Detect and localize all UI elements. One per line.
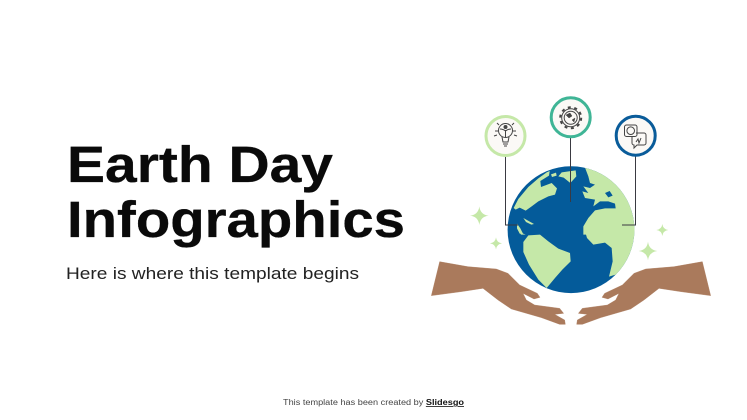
- central america: [518, 230, 526, 235]
- caribbean: [523, 218, 534, 225]
- footer credit: This template has been created by Slidesgo: [283, 398, 464, 407]
- connector lines: [506, 137, 636, 225]
- southern hemisphere land: [518, 227, 645, 288]
- africa: [586, 226, 634, 277]
- globe: [508, 166, 645, 293]
- sparkles: [470, 206, 668, 260]
- illustration: earth in hands: [431, 166, 711, 324]
- right hand: [577, 262, 711, 324]
- subtitle: Here is where this template begins: [66, 264, 359, 283]
- icon circle: gear with globe: [551, 98, 590, 137]
- europe and asia with africa: [582, 168, 634, 235]
- icon circle: light bulb: [486, 116, 525, 156]
- title: Earth Day: [67, 136, 334, 193]
- title: [67, 136, 405, 248]
- mexico: [517, 224, 523, 234]
- left hand: [431, 262, 565, 324]
- icon circle: speech bubbles: [616, 116, 655, 155]
- greenland: [558, 170, 576, 183]
- south america: [523, 235, 571, 288]
- north america: [514, 171, 557, 211]
- black sea: [605, 191, 613, 197]
- title: Infographics: [67, 191, 405, 248]
- northern hemisphere land: [514, 168, 645, 235]
